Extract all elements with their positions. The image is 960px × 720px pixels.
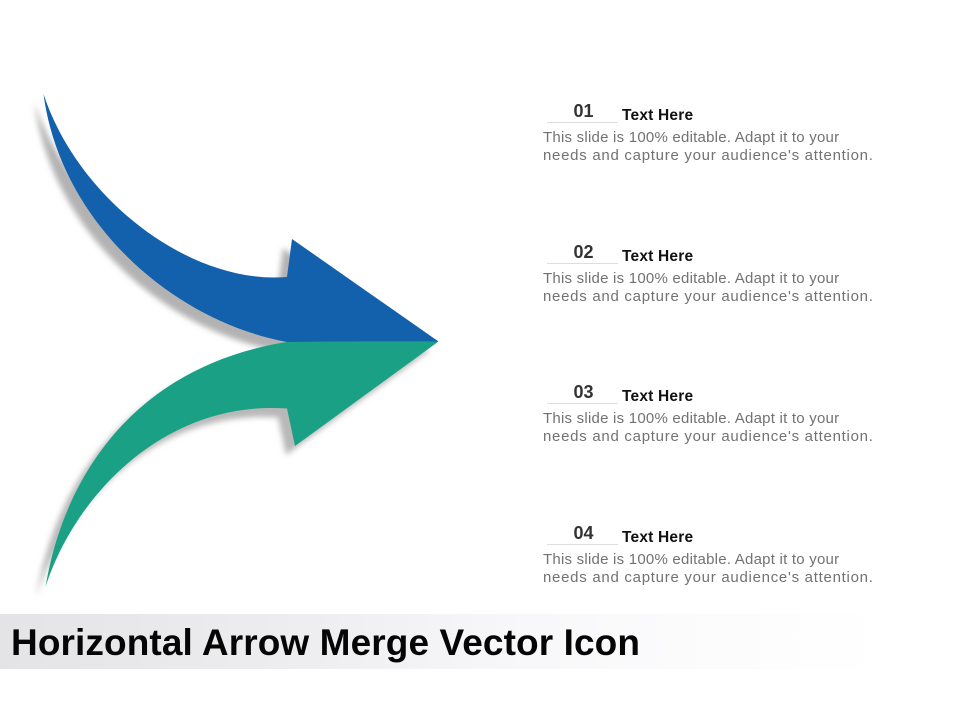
title: Horizontal Arrow Merge Vector Icon [11, 622, 640, 663]
number 02: 02 [573, 242, 594, 262]
heading 03: Text Here [622, 388, 693, 405]
number 04: 04 [573, 522, 594, 542]
green arrow [46, 342, 438, 587]
number 03: 03 [573, 382, 594, 402]
shadow: green arrow [36, 350, 430, 596]
list item 04 [543, 522, 874, 586]
body text 01 [543, 129, 874, 164]
number 01: 01 [573, 101, 594, 121]
body text 02: needs and capture your audience's attention. [543, 288, 874, 305]
list item 03 [543, 382, 874, 445]
heading 04: Text Here [622, 528, 693, 546]
body text 03 [543, 410, 874, 445]
body text 04: needs and capture your audience's attention. [543, 569, 874, 586]
shadow: blue arrow [34, 103, 430, 351]
body text 04: This slide is 100% editable. Adapt it to your [543, 550, 839, 568]
list item 01 [543, 101, 874, 164]
body text 02: This slide is 100% editable. Adapt it to your [543, 270, 839, 286]
body text 01: This slide is 100% editable. Adapt it to your [543, 129, 839, 146]
title band [0, 614, 880, 669]
body text 04 [543, 550, 874, 586]
list item 02 [543, 242, 874, 305]
body text 03: This slide is 100% editable. Adapt it to your [543, 410, 839, 427]
body text 01: needs and capture your audience's attention. [543, 147, 874, 164]
heading 01: Text Here [622, 107, 693, 124]
body text 03: needs and capture your audience's attention. [543, 428, 874, 445]
heading 02: Text Here [622, 248, 693, 264]
body text 02 [543, 270, 874, 305]
blue arrow [44, 94, 438, 342]
